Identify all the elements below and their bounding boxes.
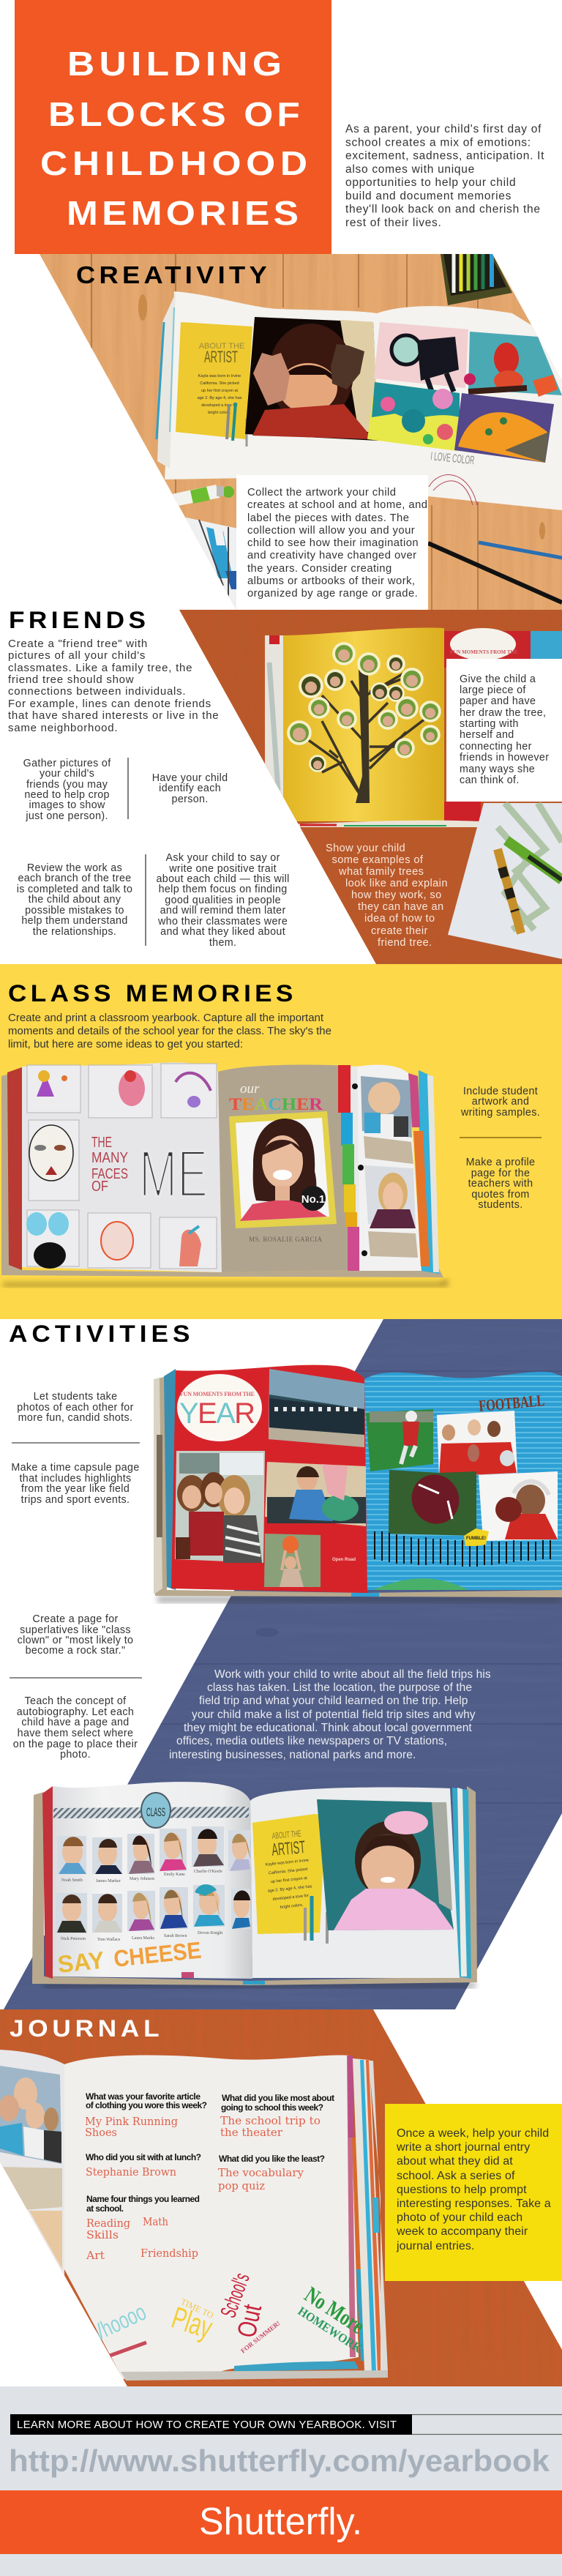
journal questions: pop quiz bbox=[218, 2179, 265, 2192]
journal questions: Math bbox=[143, 2215, 168, 2228]
yearbook spread: say cheese and about the artist bbox=[32, 1782, 477, 1988]
creativity text box: child to see how their imagination bbox=[247, 537, 419, 549]
rainbow tabs bbox=[338, 1065, 359, 1271]
give the child text box: connecting her bbox=[460, 741, 532, 753]
orange brand band bbox=[0, 2490, 562, 2554]
sticker: time to play: Play bbox=[168, 2300, 217, 2345]
tip: gather pictures bbox=[23, 758, 111, 822]
pencil tray bbox=[441, 254, 512, 305]
paint box bbox=[183, 517, 238, 610]
tip: superlatives: Create a page for bbox=[32, 1613, 119, 1625]
journal questions: The school trip to bbox=[220, 2114, 321, 2127]
title: BLOCKS OF bbox=[48, 96, 300, 133]
friends body text: For example, lines can denote friends bbox=[8, 698, 211, 710]
journal text box: journal entries. bbox=[396, 2240, 475, 2252]
student portraits: Emily Kane bbox=[164, 1873, 185, 1877]
tip: time capsule bbox=[11, 1462, 140, 1506]
friends body text: connections between individuals. bbox=[8, 685, 186, 698]
tip: time capsule: from the year like field bbox=[21, 1483, 130, 1495]
journal questions: Reading bbox=[86, 2217, 130, 2230]
field trips text: class has taken. List the location, the purpose of the bbox=[207, 1681, 472, 1694]
intro text bbox=[345, 123, 544, 229]
tip: gather pictures: need to help crop bbox=[24, 789, 110, 801]
classroom girls photo bbox=[175, 1451, 265, 1563]
blue pencil bbox=[479, 542, 562, 558]
footer bbox=[0, 2386, 562, 2576]
class memories intro: limit, but here are some ideas to get you started: bbox=[8, 1038, 243, 1050]
sticker: no more homework: No More bbox=[300, 2282, 370, 2339]
tip: positive trait: help them focus on finding bbox=[159, 884, 288, 895]
child photo bbox=[245, 317, 378, 441]
class band: CLASS bbox=[146, 1805, 165, 1819]
show your child text: create their bbox=[371, 925, 428, 937]
tip: review the work: the child about any bbox=[29, 894, 121, 906]
creativity text box: the years. Consider creating bbox=[247, 563, 392, 575]
class band bbox=[53, 1793, 249, 1828]
our teacher title: our bbox=[240, 1081, 260, 1097]
about the artist block: age 2. By age 4, she has bbox=[267, 1884, 312, 1894]
tip: student artwork: Include student bbox=[463, 1086, 538, 1097]
many faces of me title: OF bbox=[91, 1179, 108, 1195]
friends body text: pictures of all your child's bbox=[8, 649, 146, 662]
tip: gather pictures: Gather pictures of bbox=[23, 758, 111, 769]
show your child text: look like and explain bbox=[345, 878, 448, 889]
football photo bbox=[389, 1467, 476, 1536]
show your child text: what family trees bbox=[338, 866, 424, 878]
crayon drawing paper bbox=[448, 803, 562, 959]
yellow artist block: developed a love for bbox=[201, 403, 238, 408]
journal questions: of clothing you wore this week? bbox=[86, 2100, 207, 2110]
many faces of me title: ME bbox=[139, 1137, 208, 1212]
red wood background bbox=[0, 2009, 562, 2386]
student portraits: Nick Peterson bbox=[61, 1937, 86, 1941]
yearbook spread: year and football bbox=[154, 1365, 562, 1603]
tip: superlatives: become a rock star." bbox=[26, 1645, 125, 1657]
yearbook spread: year and football: Open Road bbox=[332, 1558, 356, 1562]
heading: activities: ACTIVITIES bbox=[9, 1321, 190, 1348]
sticker: school's out bbox=[221, 2274, 280, 2353]
url: http://www.shutterfly.com/yearbook bbox=[9, 2444, 550, 2478]
journal questions bbox=[85, 2091, 334, 2262]
about the artist block: ARTIST bbox=[271, 1837, 307, 1860]
tip: positive trait: who their classmates were bbox=[157, 916, 288, 927]
about the artist block: up her first crayon at bbox=[271, 1876, 308, 1884]
tip: identify each person: Have your child bbox=[152, 772, 228, 784]
title bbox=[40, 45, 307, 232]
about the artist block: developed a love for bbox=[272, 1894, 309, 1902]
icon: green crayon bbox=[506, 840, 562, 880]
sticker: school's out: School's bbox=[217, 2270, 255, 2321]
yellow artist block: up her first crayon at bbox=[201, 389, 239, 393]
give the child text box: friends in however bbox=[460, 752, 549, 764]
field trips text: your child make a list of potential field trip sites and why bbox=[192, 1709, 476, 1721]
sticker: school's out: Out bbox=[231, 2301, 267, 2340]
journal questions: Shoes bbox=[85, 2126, 117, 2139]
creativity text box: organized by age range or grade. bbox=[247, 588, 418, 600]
panel: friends bbox=[8, 608, 562, 964]
journal questions: The vocabulary bbox=[218, 2166, 304, 2179]
tip: review the work: possible mistakes to bbox=[25, 905, 124, 916]
fence and fumble badge: FUMBLE! bbox=[466, 1537, 486, 1541]
tip: teacher profile: teachers with bbox=[468, 1178, 533, 1190]
tip: review the work: help them understand bbox=[21, 915, 128, 927]
tip: candid shots: photos of each other for bbox=[17, 1402, 134, 1414]
many faces of me title bbox=[91, 1135, 208, 1212]
student drawings bbox=[26, 1064, 217, 1269]
yellow artist block: age 2. By age 4, she has bbox=[198, 396, 242, 400]
journal book bbox=[0, 2050, 388, 2381]
tip: teacher profile: students. bbox=[478, 1199, 523, 1211]
tip: student artwork: artwork and bbox=[472, 1096, 529, 1108]
tip: teacher profile bbox=[466, 1157, 535, 1211]
give the child text box: herself and bbox=[460, 729, 514, 741]
tip: gather pictures: friends (you may bbox=[26, 779, 108, 791]
book: yellow friend tree page bbox=[265, 628, 562, 827]
about the artist block: California. She picked bbox=[269, 1867, 307, 1875]
about the artist block: Kaylie was born in Irvine bbox=[265, 1859, 309, 1867]
group field trip photo bbox=[269, 1369, 364, 1447]
field trips text: they might be educational. Think about local government bbox=[184, 1722, 472, 1734]
tip: autobiography: child have a page and bbox=[21, 1717, 130, 1728]
year title circle: FUN MOMENTS FROM THE bbox=[180, 1391, 255, 1397]
intro text: they'll look back on and cherish the bbox=[345, 204, 541, 215]
journal text box: interesting responses. Take a bbox=[397, 2198, 551, 2210]
friends body text: friend tree should show bbox=[8, 673, 134, 686]
journal questions: My Pink Running bbox=[85, 2115, 178, 2128]
intro text: excitement, sadness, anticipation. It bbox=[345, 149, 544, 163]
student portraits: Noah Smith bbox=[61, 1878, 83, 1883]
intro text: also comes with unique bbox=[345, 163, 475, 176]
artist girl photo bbox=[317, 1799, 454, 1930]
intro text: opportunities to help your child bbox=[345, 176, 516, 189]
teacher portrait: No.1 bbox=[301, 1193, 325, 1206]
our teacher title: TEACHER bbox=[229, 1095, 323, 1113]
tip: positive trait bbox=[156, 852, 290, 949]
heading: creativity: CREATIVITY bbox=[76, 262, 267, 289]
notebook photos bbox=[352, 1076, 418, 1258]
intro text: school creates a mix of emotions: bbox=[345, 136, 531, 149]
sticker: time to play: TIME TO bbox=[179, 2296, 215, 2321]
give the child text box: her draw the tree, bbox=[460, 707, 546, 719]
journal questions: at school. bbox=[86, 2203, 124, 2214]
title: BUILDING bbox=[67, 45, 282, 83]
journal questions: Friendship bbox=[140, 2247, 198, 2260]
tip: candid shots: Let students take bbox=[34, 1391, 117, 1403]
friends body text bbox=[8, 638, 219, 734]
sticker: no more homework bbox=[297, 2286, 363, 2353]
book: yellow friend tree page: FUN MOMENTS FROM THE bbox=[450, 649, 518, 655]
tip: autobiography bbox=[13, 1695, 138, 1761]
show your child text bbox=[326, 843, 448, 949]
tip: review the work: Review the work as bbox=[27, 862, 122, 874]
open book: artist spread bbox=[157, 291, 562, 510]
intro text: As a parent, your child's first day of bbox=[345, 123, 542, 135]
tip: review the work: the relationships. bbox=[33, 926, 116, 938]
red and teal drawing bbox=[464, 332, 562, 397]
tip: time capsule: trips and sport events. bbox=[21, 1494, 130, 1506]
creativity text box: albums or artbooks of their work, bbox=[247, 575, 416, 587]
tip: positive trait: and what they liked about bbox=[160, 926, 285, 938]
show your child text: friend tree. bbox=[378, 937, 432, 949]
tip: positive trait: good qualities in people bbox=[165, 895, 281, 906]
icon: yellow crayon bbox=[498, 849, 521, 933]
journal questions: Stephanie Brown bbox=[86, 2165, 176, 2179]
tip: autobiography: have them select where bbox=[18, 1728, 133, 1739]
intro text: rest of their lives. bbox=[345, 217, 442, 229]
tip: review the work: is completed and talk to bbox=[17, 884, 132, 895]
yellow artist block: ARTIST bbox=[204, 348, 238, 366]
friends body text: same neighborhood. bbox=[8, 722, 118, 734]
tip: review the work: each branch of the tree bbox=[18, 873, 132, 884]
many faces of me title: THE bbox=[91, 1135, 112, 1151]
creativity text box: collection will allow you and your bbox=[247, 525, 415, 537]
header panel bbox=[15, 0, 331, 254]
say cheese title: SAY bbox=[56, 1946, 105, 1978]
sticker: school's out: FOR SUMMER! bbox=[239, 2320, 282, 2355]
journal text box: week to accompany their bbox=[396, 2225, 528, 2238]
class memories intro bbox=[8, 1012, 331, 1050]
show your child text: idea of how to bbox=[364, 913, 435, 925]
tip: autobiography: photo. bbox=[60, 1749, 91, 1761]
year title circle bbox=[177, 1374, 262, 1441]
friends body text: that have shared interests or live in the bbox=[8, 709, 219, 722]
friends body text: Create a "friend tree" with bbox=[8, 638, 148, 650]
tip: identify each person: identify each bbox=[159, 783, 221, 794]
tip: gather pictures: your child's bbox=[40, 768, 94, 780]
boy photo bbox=[265, 1462, 366, 1526]
tip: candid shots: more fun, candid shots. bbox=[18, 1412, 132, 1424]
about the artist block: ABOUT THE bbox=[271, 1829, 301, 1841]
yellow artist block: ABOUT THE bbox=[199, 342, 244, 351]
intro text: build and document memories bbox=[345, 190, 512, 202]
journal questions: going to school this week? bbox=[221, 2102, 323, 2113]
heading: journal: JOURNAL bbox=[10, 2016, 160, 2042]
tip: positive trait: about each child — this will bbox=[156, 873, 290, 885]
tip: identify each person bbox=[152, 772, 228, 805]
creativity text box: creates at school and at home, and bbox=[247, 499, 427, 511]
tip: positive trait: Ask your child to say or bbox=[165, 852, 280, 864]
paint brush bbox=[428, 543, 562, 602]
give the child text box: many ways she bbox=[460, 764, 535, 775]
tip: superlatives: clown" or "most likely to bbox=[18, 1635, 133, 1646]
journal questions: Art bbox=[86, 2249, 105, 2262]
class memories intro: Create and print a classroom yearbook. Capture all the important bbox=[8, 1012, 324, 1024]
journal text box: school. Ask a series of bbox=[397, 2170, 515, 2182]
sticker: time to play bbox=[171, 2299, 214, 2342]
give the child text box: can think of. bbox=[460, 774, 520, 786]
student portraits: Mary Johnson bbox=[130, 1877, 154, 1881]
panel: activities bbox=[0, 1319, 562, 2009]
class memories intro: moments and details of the school year for the class. The sky's the bbox=[8, 1025, 331, 1037]
call to action bar: LEARN MORE ABOUT HOW TO CREATE YOUR OWN YEARBOOK. VISIT bbox=[17, 2419, 397, 2431]
tip: review the work bbox=[17, 862, 132, 938]
give the child text box: Give the child a bbox=[460, 673, 536, 685]
student portraits: James Marker bbox=[96, 1879, 121, 1884]
many faces of me title: FACES bbox=[91, 1166, 128, 1182]
journal text box: write a short journal entry bbox=[396, 2141, 530, 2154]
yellow artist block: California. She picked bbox=[200, 381, 239, 386]
student portraits: Laura Marks bbox=[132, 1936, 154, 1941]
field trips text: interesting businesses, national parks and more. bbox=[169, 1749, 416, 1761]
field trips text: field trip and what your child learned on the trip. Help bbox=[199, 1695, 468, 1707]
yellow artist block: Kayla was born in Irvine bbox=[198, 374, 241, 378]
journal questions: Who did you sit with at lunch? bbox=[86, 2152, 201, 2162]
sticker: whoooo: Whoooo bbox=[83, 2299, 150, 2348]
multi-colour drawing bbox=[367, 382, 460, 451]
show your child text: Show your child bbox=[326, 843, 405, 854]
journal questions: the theater bbox=[220, 2126, 283, 2139]
creativity text box: label the pieces with dates. The bbox=[247, 512, 409, 524]
creativity text box bbox=[236, 475, 428, 610]
ball toss photo bbox=[264, 1534, 321, 1587]
tip: positive trait: them. bbox=[209, 937, 236, 949]
give the child text box: large piece of bbox=[460, 684, 526, 696]
yellow artist block bbox=[176, 322, 252, 447]
heading: friends: FRIENDS bbox=[9, 608, 146, 634]
student portraits: Charlie O'Keefe bbox=[194, 1869, 222, 1874]
journal text box: questions to help prompt bbox=[397, 2184, 527, 2196]
heading: class memories: CLASS MEMORIES bbox=[8, 981, 293, 1007]
helmet boy photo bbox=[479, 1471, 558, 1541]
tip: autobiography: on the page to place their bbox=[13, 1739, 138, 1750]
title: MEMORIES bbox=[67, 195, 299, 232]
tip: gather pictures: just one person). bbox=[25, 810, 108, 822]
tip: superlatives: superlatives like "class bbox=[20, 1624, 131, 1636]
panel: class memories bbox=[0, 964, 562, 1319]
field trips text: Work with your child to write about all the field trips his bbox=[214, 1668, 491, 1681]
tip: student artwork bbox=[460, 1086, 540, 1119]
dark wood background bbox=[176, 610, 562, 964]
icon: green paint tube bbox=[172, 485, 234, 507]
student portraits: Sarah Brown bbox=[164, 1934, 187, 1938]
creativity text box: Collect the artwork your child bbox=[247, 487, 396, 499]
tip: positive trait: write one positive trait bbox=[168, 863, 277, 875]
about the artist block: bright colors. bbox=[280, 1903, 304, 1910]
tip: autobiography: autobiography. Let each bbox=[17, 1706, 134, 1718]
purple and orange drawing bbox=[454, 393, 554, 463]
tip: superlatives bbox=[18, 1613, 133, 1657]
our teacher title bbox=[229, 1081, 323, 1113]
tip: positive trait: and will remind them later bbox=[160, 905, 286, 916]
say cheese title bbox=[56, 1936, 203, 1978]
sticker: no more homework: HOMEWORK bbox=[296, 2304, 365, 2356]
journal text box bbox=[385, 2104, 562, 2281]
give the child text box bbox=[446, 659, 562, 802]
show your child text: some examples of bbox=[332, 854, 424, 866]
open book: artist spread: I LOVE COLOR bbox=[430, 450, 475, 467]
blue wood background bbox=[0, 1319, 562, 2009]
tip: teacher profile: page for the bbox=[471, 1168, 530, 1179]
tip: autobiography: Teach the concept of bbox=[25, 1695, 126, 1707]
journal text box: about what they did at bbox=[397, 2155, 513, 2168]
journal questions: What did you like most about bbox=[222, 2093, 334, 2103]
call to action bar bbox=[10, 2414, 562, 2435]
pink drawing bbox=[374, 322, 468, 392]
show your child text: how they work, so bbox=[351, 889, 442, 901]
team boys photo bbox=[437, 1411, 517, 1477]
tip: teacher profile: quotes from bbox=[471, 1189, 530, 1201]
tip: candid shots bbox=[17, 1391, 134, 1424]
logo: shutterfly: Shutterfly. bbox=[199, 2501, 362, 2543]
wood background bbox=[0, 254, 562, 610]
tip: time capsule: Make a time capsule page bbox=[11, 1462, 140, 1474]
tip: time capsule: that includes highlights bbox=[19, 1473, 132, 1485]
panel: journal bbox=[0, 2009, 562, 2386]
panel: creativity bbox=[0, 254, 562, 610]
creativity text box: and creativity have changed over bbox=[247, 550, 417, 561]
friends body text: classmates. Like a family tree, the bbox=[8, 662, 192, 674]
tip: student artwork: writing samples. bbox=[460, 1107, 540, 1119]
title: CHILDHOOD bbox=[40, 145, 307, 182]
year title circle: YEAR bbox=[179, 1397, 255, 1430]
show your child text: they can have an bbox=[358, 901, 444, 913]
give the child text box: paper and have bbox=[460, 695, 536, 707]
student portraits bbox=[56, 1826, 250, 1942]
student portraits: Devon Knight bbox=[198, 1931, 222, 1935]
journal questions: What was your favorite article bbox=[86, 2091, 201, 2102]
field trips text: offices, media outlets like newspapers or TV stations, bbox=[176, 1735, 447, 1747]
many faces of me title: MANY bbox=[91, 1150, 128, 1166]
give the child text box: starting with bbox=[460, 718, 519, 730]
tip: identify each person: person. bbox=[172, 794, 209, 805]
student portraits: Tom Wallace bbox=[97, 1938, 121, 1942]
journal questions: What did you like the least? bbox=[219, 2154, 325, 2164]
tip: teacher profile: Make a profile bbox=[466, 1157, 535, 1168]
chart: friend tree bbox=[288, 643, 441, 803]
journal questions: Skills bbox=[86, 2228, 119, 2241]
teacher portrait: MS. ROSALIE GARCIA bbox=[249, 1236, 322, 1243]
green field photo bbox=[366, 1409, 433, 1471]
journal text box: photo of your child each bbox=[397, 2211, 522, 2224]
journal text box: Once a week, help your child bbox=[397, 2127, 549, 2140]
journal questions: Name four things you learned bbox=[86, 2194, 200, 2204]
teacher portrait bbox=[229, 1111, 337, 1243]
about the artist block bbox=[252, 1814, 327, 1944]
yellow artist block: bright colors. bbox=[208, 411, 231, 415]
fence and fumble badge bbox=[373, 1528, 550, 1590]
tip: gather pictures: images to show bbox=[29, 799, 105, 811]
yearbook spread: the many faces of me / our teacher bbox=[1, 1062, 448, 1287]
say cheese title: CHEESE bbox=[113, 1937, 203, 1972]
field trips text bbox=[169, 1668, 491, 1761]
